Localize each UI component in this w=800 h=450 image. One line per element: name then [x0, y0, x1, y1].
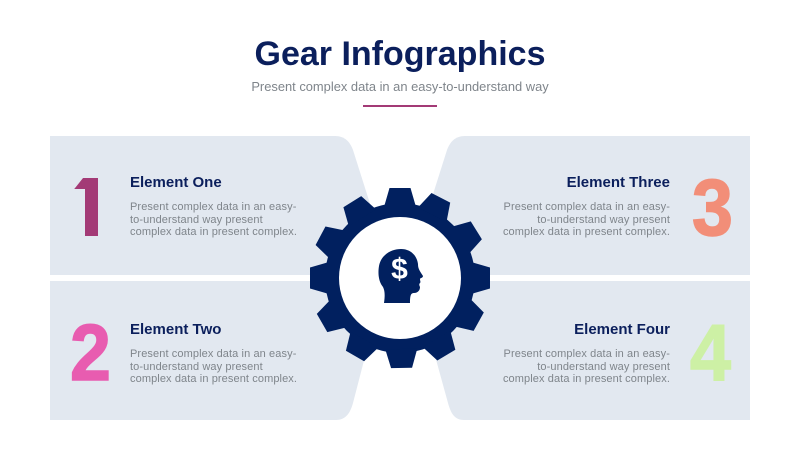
element three text: Present complex data in an easy-	[504, 201, 670, 213]
element two text: complex data in present complex.	[130, 373, 297, 385]
element four text	[503, 348, 670, 385]
element four text: to-understand way present	[537, 360, 670, 372]
panel: element four	[432, 281, 750, 420]
number 3: 3	[692, 163, 733, 252]
number 1: 1	[68, 163, 112, 252]
element three text	[503, 201, 670, 238]
number 2: 2	[70, 308, 111, 397]
number 4: 4	[690, 308, 731, 397]
element two heading: Element Two	[130, 321, 221, 338]
element four text: complex data in present complex.	[503, 373, 670, 385]
element two text: Present complex data in an easy-	[130, 348, 296, 360]
element one text: Present complex data in an easy-	[130, 201, 296, 213]
gear with head icon	[310, 188, 490, 368]
title underline	[363, 105, 437, 107]
subtitle: Present complex data in an easy-to-understand way	[251, 79, 549, 94]
panel: element two	[50, 281, 368, 420]
element three text: complex data in present complex.	[503, 226, 670, 238]
title: Gear Infographics	[255, 35, 545, 73]
icon: head with dollar sign: $	[391, 253, 408, 286]
icon: head with dollar sign	[378, 249, 423, 303]
element three text: to-understand way present	[537, 214, 670, 226]
panel: element one	[50, 136, 372, 275]
element three heading: Element Three	[567, 174, 670, 191]
element one heading: Element One	[130, 174, 222, 191]
element four text: Present complex data in an easy-	[504, 348, 670, 360]
element four heading: Element Four	[574, 321, 670, 338]
element one text: to-understand way present	[130, 214, 263, 226]
panel: element three	[428, 136, 750, 275]
element one text	[130, 201, 297, 238]
element one text: complex data in present complex.	[130, 226, 297, 238]
element two text	[130, 348, 297, 385]
element two text: to-understand way present	[130, 360, 263, 372]
gear	[310, 188, 490, 368]
